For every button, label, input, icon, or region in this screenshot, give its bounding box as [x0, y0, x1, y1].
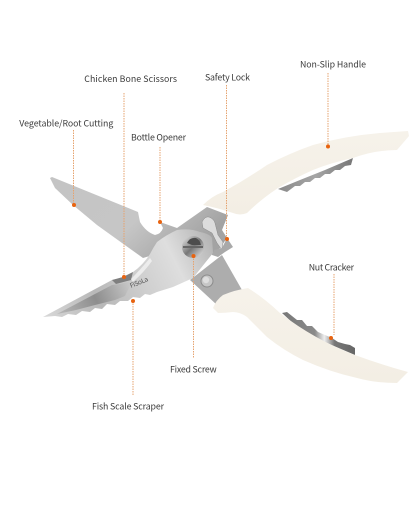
notch shading — [112, 272, 133, 284]
callout: Nut Cracker: Nut Cracker — [309, 260, 355, 274]
callout: Chicken Bone Scissors: Chicken Bone Scissors — [84, 72, 177, 85]
callout: Fixed Screw: Fixed Screw — [170, 362, 217, 376]
callout: Vegetable/Root Cutting — [19, 116, 113, 207]
callout: Chicken Bone Scissors — [84, 72, 177, 279]
callout: Non-Slip Handle: Non-Slip Handle — [300, 58, 366, 70]
callout: Nut Cracker — [309, 260, 355, 340]
safety lock lever — [212, 238, 233, 257]
upper handle — [203, 131, 409, 214]
lower blade bevel — [57, 281, 132, 314]
lower handle — [213, 288, 408, 383]
callout: Non-Slip Handle — [300, 58, 366, 148]
lower blade — [43, 229, 213, 317]
upper blade — [50, 177, 228, 258]
callout: Vegetable/Root Cutting: Vegetable/Root Cutting — [19, 116, 113, 130]
callout: Safety Lock — [205, 70, 250, 241]
scissors illustration — [43, 131, 409, 383]
callout: Safety Lock: Safety Lock — [205, 70, 250, 84]
lower handle serration — [282, 312, 355, 355]
upper handle serration — [278, 158, 353, 192]
safety lock slot — [202, 217, 223, 250]
brand text: FiSoLa — [128, 273, 150, 290]
callout: Fish Scale Scraper — [92, 299, 165, 412]
main pivot screw — [182, 236, 204, 258]
blade highlight — [131, 258, 152, 282]
lower rear steel arm — [190, 255, 242, 305]
callout: Bottle Opener: Bottle Opener — [131, 130, 187, 144]
callout: Fixed Screw — [170, 254, 217, 376]
callout: Fish Scale Scraper: Fish Scale Scraper — [92, 400, 165, 412]
callout: Bottle Opener — [131, 130, 187, 224]
fixed screw — [201, 275, 213, 287]
